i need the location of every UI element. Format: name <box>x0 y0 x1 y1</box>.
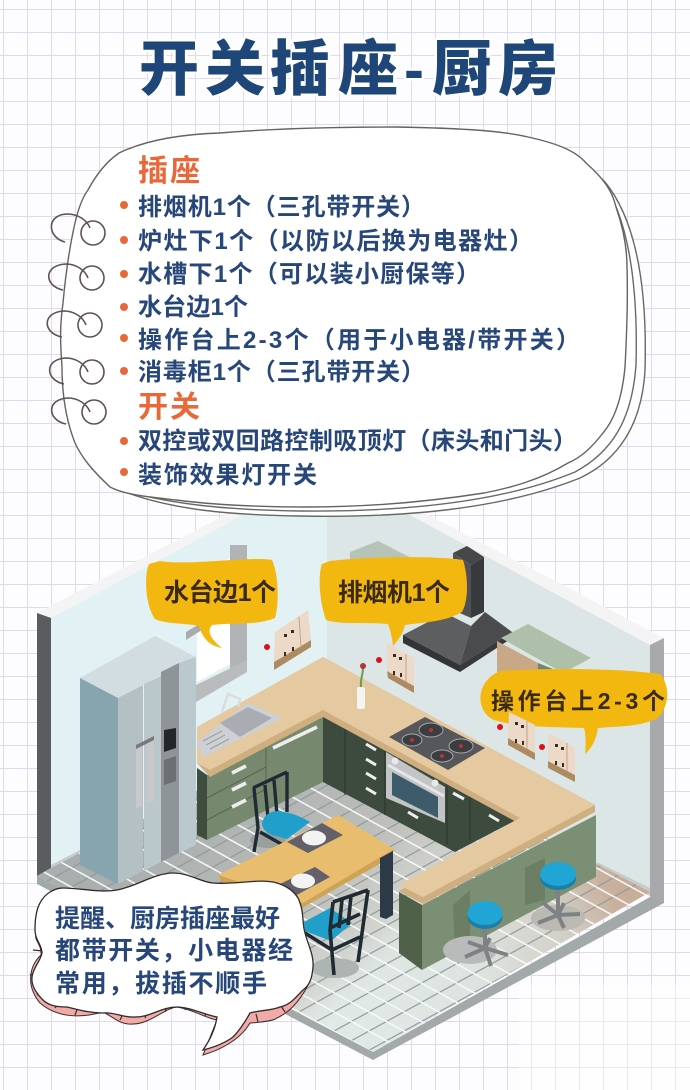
callout: range hood: 排烟机1个 <box>338 579 450 607</box>
bullet list: sockets: 炉灶下1个（以防以后换为电器灶） <box>138 228 533 255</box>
bubble body <box>32 873 313 1050</box>
bullet list: sockets: 水槽下1个（可以装小厨保等） <box>138 261 480 288</box>
peninsula side <box>399 815 596 970</box>
socket 2 <box>376 643 414 693</box>
bubble text <box>55 905 293 998</box>
title: 开关插座-厨房 <box>139 36 558 103</box>
stool right <box>525 858 585 931</box>
upper cabinet right <box>497 624 591 682</box>
bubble shadow <box>30 935 307 1055</box>
bullet list: sockets: 消毒柜1个（三孔带开关） <box>138 359 425 386</box>
cooktop <box>389 717 485 770</box>
refrigerator <box>80 636 196 884</box>
left wall <box>37 462 327 878</box>
bullet list: switches <box>120 428 577 489</box>
callout: worktop <box>480 669 667 754</box>
stool left <box>443 890 508 966</box>
bullet list: sockets: 水台边1个 <box>138 293 248 321</box>
spiral rings <box>47 214 106 424</box>
back wall <box>327 462 664 903</box>
countertop <box>197 657 595 904</box>
chair back-left <box>250 772 310 852</box>
back cabinets dark <box>323 712 520 852</box>
back pages <box>115 130 645 516</box>
bubble text: 都带开关，小电器经 <box>55 937 293 965</box>
bullet list: sockets: 操作台上2-3个（用于小电器/带开关） <box>138 326 580 354</box>
socket 3 over worktop callout <box>497 712 535 760</box>
callout: water counter <box>146 559 278 648</box>
bullet list: sockets: 排烟机1个（三孔带开关） <box>138 194 425 221</box>
socket plates <box>264 610 575 782</box>
notepad <box>47 127 645 516</box>
vase and flower <box>357 663 366 709</box>
window <box>186 545 247 702</box>
front page <box>61 127 627 507</box>
bubble text: 常用，拔插不顺手 <box>55 970 267 998</box>
upper cabinet left <box>350 541 425 580</box>
bubble text: 提醒、厨房插座最好 <box>55 905 280 933</box>
range hood <box>403 546 512 672</box>
reminder speech bubble <box>30 873 313 1055</box>
floor <box>37 782 650 1052</box>
dining table <box>218 815 394 919</box>
callout: water counter: 水台边1个 <box>164 578 276 607</box>
heading: switches: 开关 <box>138 391 200 424</box>
left lower cabinets <box>197 715 323 840</box>
socket 1 <box>264 610 311 670</box>
placemats and plates <box>278 823 343 897</box>
sink <box>197 694 282 757</box>
socket 4 <box>539 733 575 782</box>
oven <box>386 752 445 823</box>
bullet list: switches: 双控或双回路控制吸顶灯（床头和门头） <box>138 428 577 455</box>
callout: range hood <box>320 557 467 646</box>
kitchen illustration <box>37 513 664 1060</box>
callout: worktop: 操作台上2-3个 <box>491 688 665 714</box>
floor slab edge <box>37 876 664 1060</box>
bullet list: sockets <box>120 194 580 386</box>
chair front <box>304 890 368 978</box>
bullet list: switches: 装饰效果灯开关 <box>138 462 317 489</box>
heading: sockets: 插座 <box>138 155 200 188</box>
